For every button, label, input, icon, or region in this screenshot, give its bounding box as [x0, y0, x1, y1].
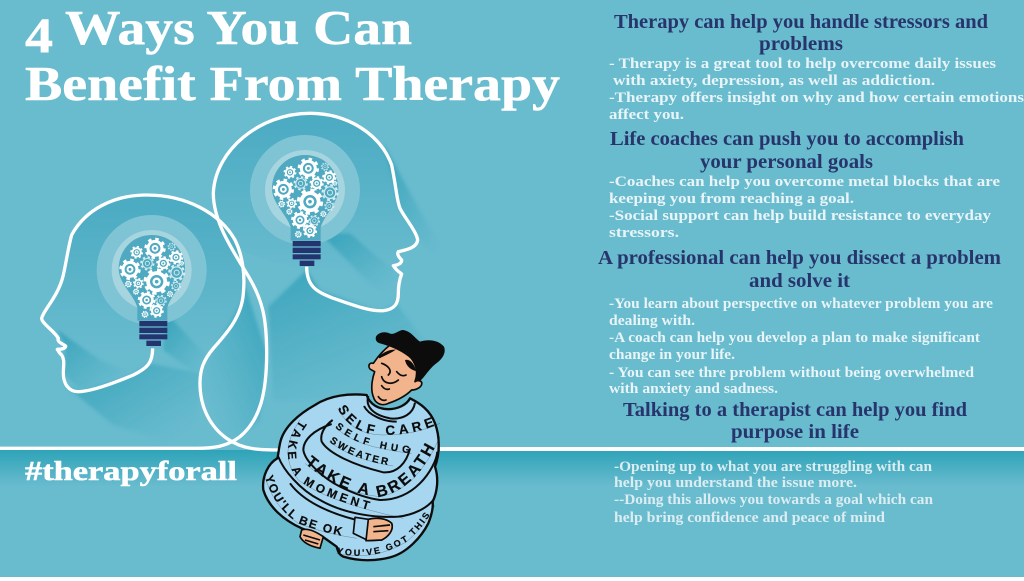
white outline of left head	[42, 195, 280, 450]
body 3: - You can see thre problem without being overwhelmed	[609, 365, 974, 381]
body 3: -You learn about perspective on whatever problem you are	[609, 296, 994, 312]
title: 4	[25, 7, 53, 63]
body 3: change in your life.	[609, 347, 735, 363]
body 1: -Therapy offers insight on why and how certain emotions	[609, 90, 1024, 106]
heading 4: purpose in life	[731, 422, 859, 443]
heading 1	[614, 12, 988, 55]
hashtag: #therapyforall	[25, 456, 238, 486]
heading 2: your personal goals	[700, 152, 873, 173]
sweater slogans: TAKE A MOMENT	[288, 422, 370, 510]
body 1: - Therapy is a great tool to help overcome daily issues	[609, 56, 996, 72]
sweater slogans: SELF CARE	[338, 405, 434, 435]
body 3: -A coach can help you develop a plan to make significant	[609, 330, 980, 346]
section 2: life coaches	[609, 129, 1001, 241]
body 1: affect you.	[609, 107, 684, 123]
face details	[378, 363, 406, 400]
heading 3: and solve it	[749, 271, 851, 292]
body 2: stressors.	[609, 225, 679, 241]
left hand	[300, 529, 323, 548]
heading 4: Talking to a therapist can help you find	[623, 400, 967, 421]
hair	[376, 330, 445, 382]
illustration: man hugging himself in a sweater	[262, 330, 445, 562]
title: Benefit From Therapy	[25, 56, 561, 111]
section 1: handle stressors	[609, 12, 1024, 123]
icon: right light bulb with gears	[250, 135, 360, 266]
section 3: dissect a problem	[598, 248, 1001, 397]
white outline of right head	[0, 113, 418, 448]
body 2: -Coaches can help you overcome metal blocks that are	[609, 174, 1001, 190]
body 4: --Doing this allows you towards a goal which can	[614, 492, 933, 508]
heading 2	[610, 129, 964, 173]
section 4: find purpose	[614, 400, 967, 526]
heading 1: Therapy can help you handle stressors and	[614, 12, 988, 33]
sweater body	[263, 394, 439, 560]
heading 1: problems	[759, 34, 843, 55]
icon: left light bulb with gears	[97, 215, 207, 346]
body 2: keeping you from reaching a goal.	[609, 191, 854, 207]
body 1: with axiety, depression, as well as addiction.	[613, 73, 935, 89]
eye patch and brow	[378, 350, 416, 371]
heading 3: A professional can help you dissect a problem	[598, 248, 1001, 269]
body 3	[609, 296, 994, 397]
divider line right of the figure	[440, 447, 1024, 451]
right hand	[353, 517, 392, 541]
body 1	[609, 56, 1024, 123]
body 3: with anxiety and sadness.	[609, 381, 778, 397]
body 2	[609, 174, 1001, 241]
body 4: -Opening up to what you are struggling with can	[614, 459, 932, 475]
ears and face	[369, 345, 422, 405]
head fills and long shadows	[42, 113, 448, 447]
sweater collar	[364, 396, 415, 422]
lower band gradient	[0, 450, 1024, 486]
body 3: dealing with.	[609, 313, 695, 329]
heading 4	[623, 400, 967, 443]
sweater slogans: YOU'VE GOT THIS	[338, 512, 429, 556]
sweater folds	[278, 420, 437, 520]
body 4	[614, 459, 933, 526]
heading 3	[598, 248, 1001, 292]
sweater slogans: SELF HUG	[336, 423, 410, 453]
head and hair	[369, 330, 445, 405]
sweater slogans	[265, 405, 440, 556]
sweater slogans: SWEATER	[330, 437, 388, 466]
body 4: help bring confidence and peace of mind	[614, 510, 885, 526]
body 2: -Social support can help build resistance to everyday	[609, 208, 992, 224]
heading 2: Life coaches can push you to accomplish	[610, 129, 964, 150]
sweater slogans: YOU'LL BE OK	[266, 474, 343, 536]
sweater slogans: TAKE A BREATH	[308, 442, 434, 498]
title: Ways You Can	[65, 0, 412, 55]
illustration: two heads with light bulbs	[0, 113, 448, 450]
body 4: help you understand the issue more.	[614, 475, 857, 491]
title	[25, 0, 561, 111]
